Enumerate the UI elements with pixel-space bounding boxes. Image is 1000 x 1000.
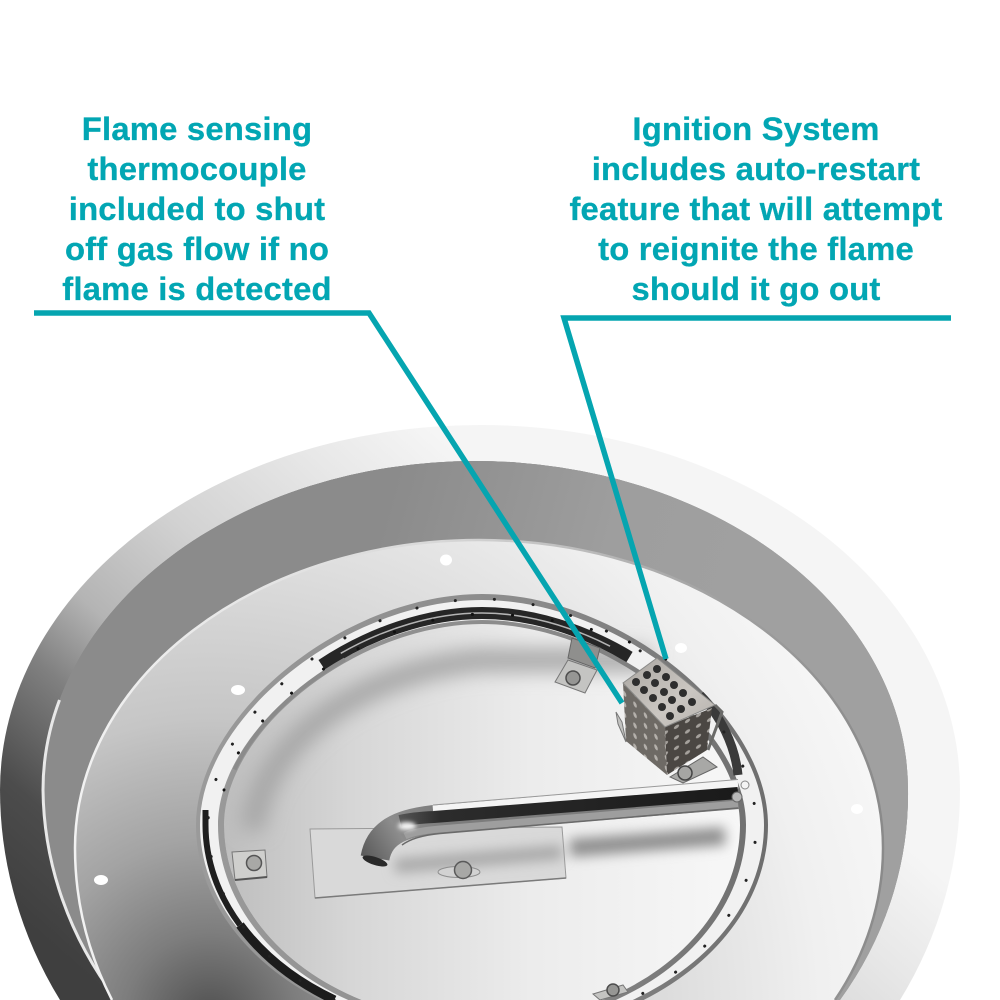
caption: ignition system: feature that will attempt	[569, 190, 943, 227]
caption: ignition system: Ignition System	[632, 110, 880, 147]
caption: thermocouple: off gas flow if no	[65, 230, 329, 267]
caption: ignition system: includes auto-restart	[592, 150, 920, 187]
caption: ignition system	[569, 110, 943, 307]
ignition perforated box	[616, 658, 722, 775]
mounting holes	[94, 554, 863, 885]
caption: thermocouple: Flame sensing	[82, 110, 312, 147]
caption: thermocouple: included to shut	[69, 190, 325, 227]
thermocouple leader line	[34, 313, 622, 703]
left bracket	[232, 850, 267, 880]
caption: thermocouple	[62, 110, 332, 307]
lower ring bracket	[593, 984, 628, 1000]
upper bracket	[555, 638, 600, 693]
caption: ignition system: to reignite the flame	[598, 230, 914, 267]
ignition box bracket	[670, 757, 717, 783]
caption: ignition system: should it go out	[631, 270, 881, 307]
floor inside burner ring	[224, 624, 740, 1000]
mounting plate	[310, 827, 566, 898]
pan floor	[75, 540, 883, 1000]
burner ring	[196, 594, 768, 1000]
caption: thermocouple: flame is detected	[62, 270, 332, 307]
pan inner wall	[43, 461, 908, 1000]
ignition leader line	[564, 318, 951, 659]
gas inlet tube	[361, 780, 738, 869]
tube and ring junction	[732, 781, 749, 802]
pan outer rim	[0, 425, 960, 1000]
caption: thermocouple: thermocouple	[87, 150, 307, 187]
